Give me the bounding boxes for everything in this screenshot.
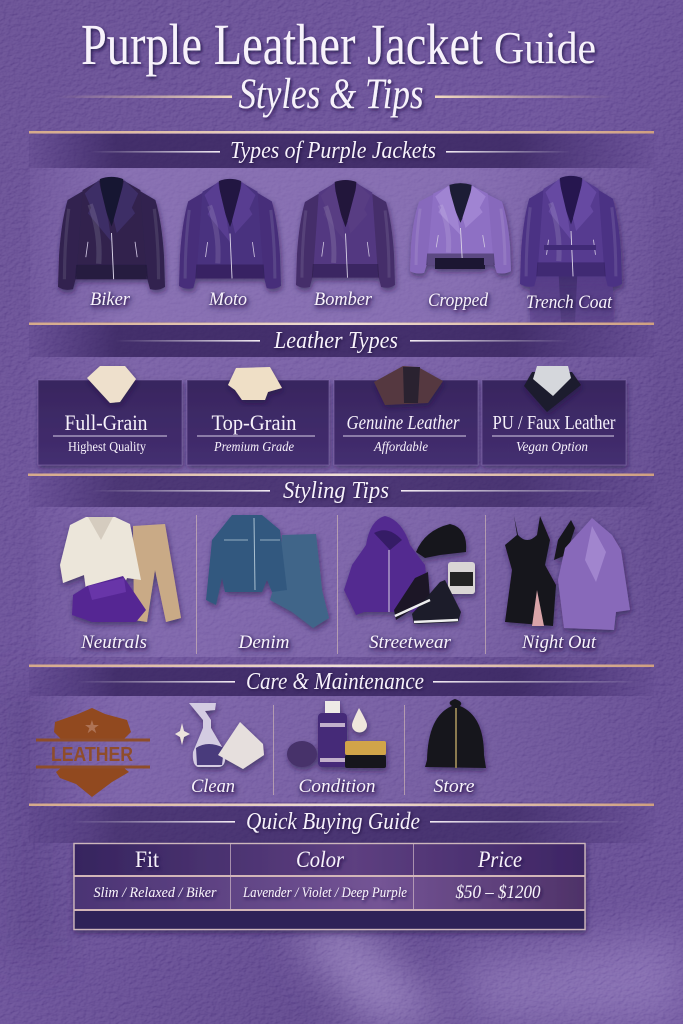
table header row: Fit <box>135 847 160 872</box>
panel: care and maintenance <box>30 696 653 802</box>
panel: jackets <box>30 168 653 322</box>
card: pu faux leather <box>482 366 626 465</box>
icon: leather badge: ★ <box>84 717 100 737</box>
icon: clean <box>175 703 264 797</box>
jacket: trench coat <box>520 176 622 322</box>
title: Purple Leather Jacket <box>81 12 483 77</box>
table values row: $50 – $1200 <box>456 882 541 903</box>
jacket: biker <box>58 177 165 310</box>
jacket: cropped <box>410 183 511 311</box>
card: pu faux leather: Vegan Option <box>516 440 588 455</box>
panel: leather types <box>30 357 653 472</box>
panel: styling tips <box>36 507 646 657</box>
outfit: streetwear <box>344 516 475 653</box>
section header: styling tips <box>28 474 654 507</box>
section header: types of purple jackets: Types of Purple Jackets <box>230 138 436 164</box>
card: top-grain: Top-Grain <box>212 410 296 435</box>
icon: store <box>425 699 486 797</box>
jacket: trench coat: Trench Coat <box>526 292 613 313</box>
icon: condition <box>287 701 386 797</box>
outfit: night out <box>505 516 630 653</box>
icon: condition: Condition <box>298 776 376 797</box>
outfit: denim <box>206 515 329 653</box>
outfit: night out: Night Out <box>521 632 597 653</box>
section header: leather types: Leather Types <box>273 328 398 354</box>
table values row: Slim / Relaxed / Biker <box>94 885 217 901</box>
card: top-grain: Premium Grade <box>213 440 294 455</box>
card: genuine leather <box>334 366 478 465</box>
table header row: Color <box>296 847 345 872</box>
jacket: bomber <box>296 180 395 310</box>
table header row: Price <box>477 847 522 872</box>
section header: care and maintenance <box>29 664 654 696</box>
section header: care and maintenance: Care & Maintenance <box>246 669 424 695</box>
card: full-grain: Highest Quality <box>68 440 146 455</box>
card: genuine leather: Genuine Leather <box>346 412 460 434</box>
outfit: denim: Denim <box>237 632 290 653</box>
outfit: streetwear: Streetwear <box>369 632 452 653</box>
section header: styling tips: Styling Tips <box>283 478 389 504</box>
jacket: bomber: Bomber <box>314 289 373 310</box>
table values row: Lavender / Violet / Deep Purple <box>242 885 407 901</box>
card: top-grain <box>187 367 329 465</box>
card: pu faux leather: PU / Faux Leather <box>492 412 616 434</box>
section header: quick buying guide: Quick Buying Guide <box>246 809 420 835</box>
section header: leather types <box>29 322 654 357</box>
card: full-grain <box>38 366 182 465</box>
card: genuine leather: Affordable <box>373 440 428 455</box>
jacket: moto: Moto <box>208 289 247 310</box>
icon: leather badge <box>36 708 150 797</box>
title: Guide <box>494 22 596 73</box>
subtitle: styles and tips: Styles & Tips <box>238 71 424 118</box>
outfit: neutrals <box>60 517 181 653</box>
icon: clean: Clean <box>191 776 235 797</box>
jacket: moto <box>179 179 281 310</box>
jacket: cropped: Cropped <box>428 290 488 311</box>
card: full-grain: Full-Grain <box>64 410 148 435</box>
icon: store: Store <box>434 776 474 797</box>
table header row <box>135 847 522 872</box>
jacket: biker: Biker <box>90 289 131 310</box>
outfit: neutrals: Neutrals <box>80 632 147 653</box>
table: quick buying guide <box>74 844 585 930</box>
table values row <box>94 882 541 903</box>
icon: leather badge: LEATHER <box>51 744 133 766</box>
section header: quick buying guide <box>29 804 654 843</box>
section header: types of purple jackets <box>29 131 654 168</box>
